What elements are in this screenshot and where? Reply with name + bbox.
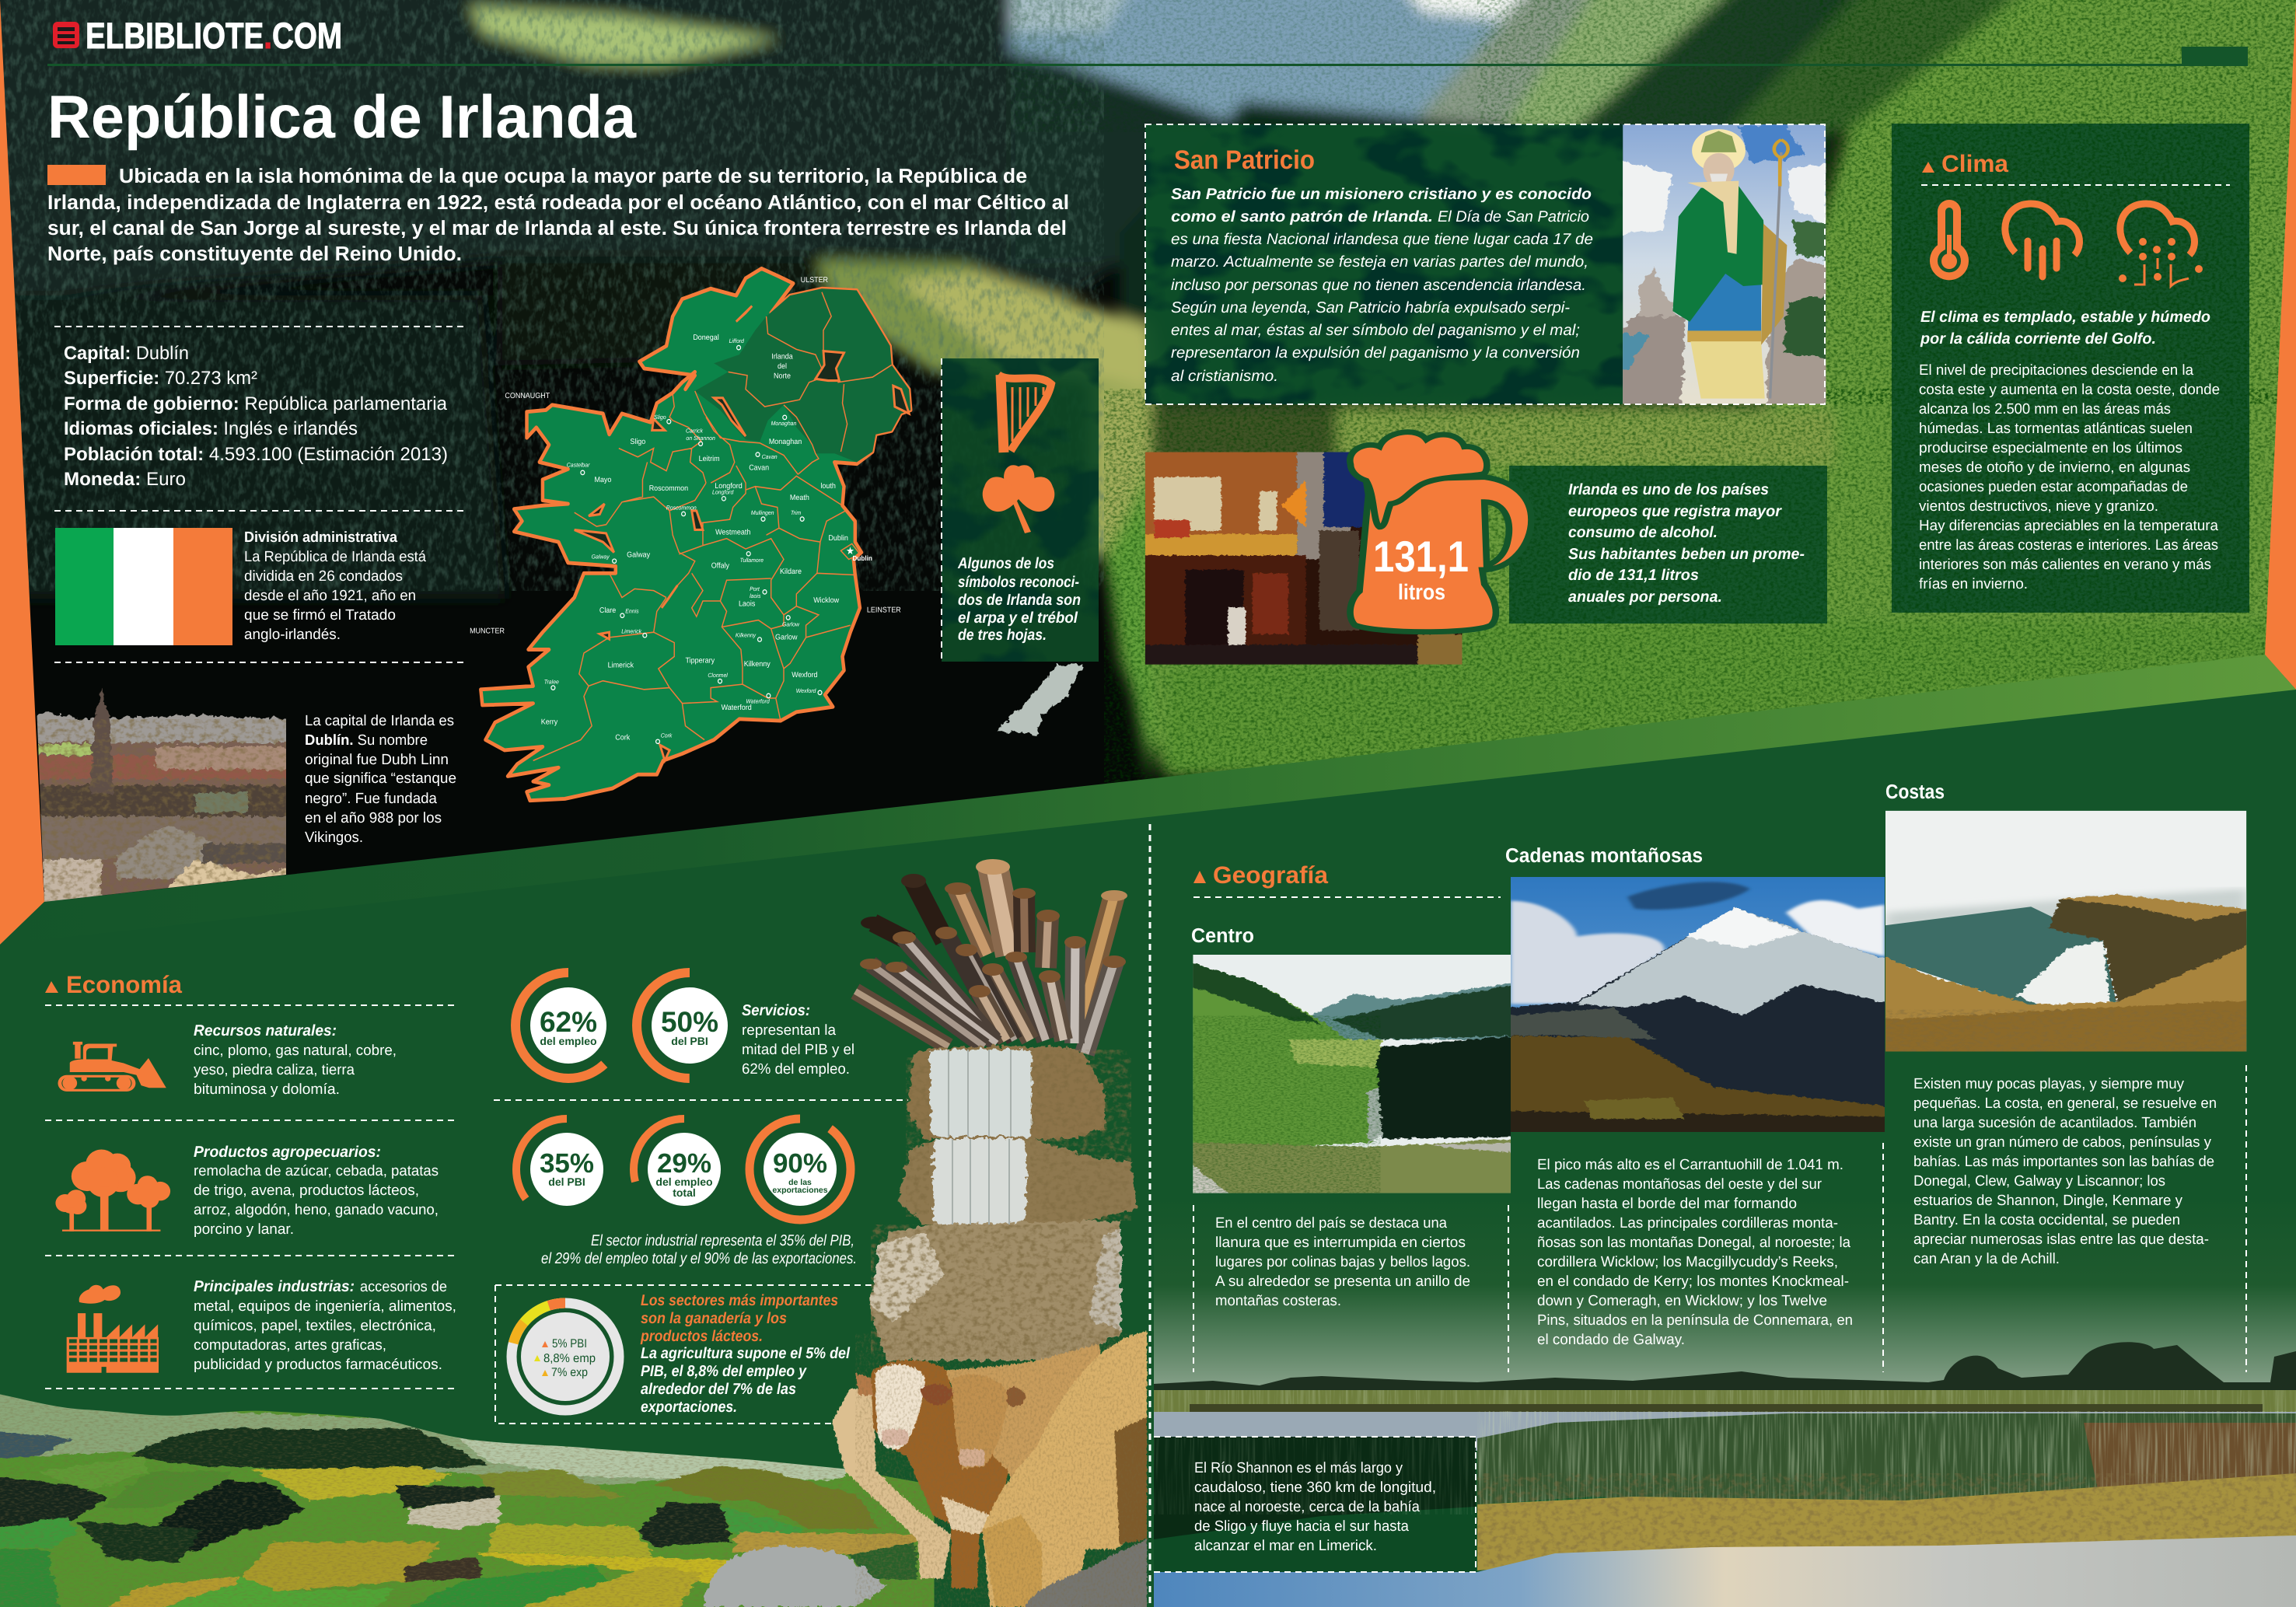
map: county labels: Cavan <box>762 453 778 460</box>
heading: Economía: Economía <box>66 971 183 998</box>
cow: front-left <box>871 1360 1008 1588</box>
header rule <box>47 64 2182 66</box>
text: Costas: una larga sucesión de acantilados. También <box>1913 1115 2196 1131</box>
text: climate body: interiores son más calientes en verano y más <box>1919 557 2211 573</box>
text: Costas: can Aran y la de Achill. <box>1913 1251 2060 1267</box>
map: county labels: Limerick <box>621 628 642 634</box>
text: agricultural products: de trigo, avena, productos lácteos, <box>194 1183 419 1199</box>
icon: hail cloud <box>2119 204 2203 286</box>
photo: central valley <box>1184 955 1519 1198</box>
text: administrative division: que se firmó el Tratado <box>244 607 396 624</box>
water strip <box>1154 1412 2296 1451</box>
cow: middle body <box>941 1343 1114 1490</box>
intro paragraph: sur, el canal de San Jorge al sureste, y el mar de Irlanda al este. Su única frontera terrestre es Irlanda del <box>47 216 1067 239</box>
text: Costas: pequeñas. La costa, en general, se resuelve en <box>1913 1095 2217 1112</box>
text: Dublin capital: negro”. Fue fundada <box>305 791 437 807</box>
text: symbols caption: Algunos de los <box>957 555 1054 572</box>
column heading: Cadenas montañosas: Cadenas montañosas <box>1505 844 1703 867</box>
text: Centro <box>1215 1215 1470 1309</box>
map: county labels: Mayo <box>594 475 611 484</box>
stat: 50% PBI: 50% <box>661 1006 718 1038</box>
map: county labels: Carrick <box>686 428 704 434</box>
facts text <box>64 343 448 490</box>
map: province labels: LEINSTER <box>867 606 901 614</box>
orange wedge: left <box>0 0 44 945</box>
map: county labels: Cavan <box>749 463 769 472</box>
icon: trees <box>55 1150 170 1231</box>
text: Costas: Existen muy pocas playas, y siempre muy <box>1913 1076 2184 1092</box>
chart labels: 5% PBI <box>552 1337 587 1350</box>
map: county labels: Longford <box>715 481 743 490</box>
map: county labels: louth <box>820 481 836 490</box>
text: natural resources: bituminosa y dolomía. <box>194 1081 340 1098</box>
map: county labels: Garlow <box>775 633 798 641</box>
text: Costas: Bantry. En la costa occidental, se pueden <box>1913 1212 2180 1228</box>
icon: beer mug <box>1350 432 1531 632</box>
panel: agriculture <box>495 1285 874 1424</box>
map: county labels: Offaly <box>711 561 729 570</box>
text: services: 62% del empleo. <box>742 1061 850 1078</box>
text: San Patricio body: Según una leyenda, San Patricio habría expulsado serpi- <box>1171 299 1570 316</box>
icon: thermometer <box>1934 204 1965 276</box>
map: loughs <box>575 306 909 760</box>
map: county labels: Cork <box>661 732 673 739</box>
map: county labels: Clare <box>599 606 616 614</box>
text: San Patricio body: representaron la expulsión del paganismo y la conversión <box>1171 344 1580 362</box>
map: county labels: Garlow <box>782 621 800 627</box>
text: climate body: entre las áreas costeras e interiores. Las áreas <box>1919 537 2218 554</box>
text: alcohol consumption: anuales por persona. <box>1568 589 1722 606</box>
map: county labels: Kilkenny <box>736 632 757 638</box>
text: San Patricio body: como el santo patrón de Irlanda. <box>1171 208 1433 225</box>
text: Cadenas montañosas: en el condado de Kerry; los montes Knockmeal- <box>1537 1273 1849 1290</box>
map: county labels: Mullingen <box>751 509 774 516</box>
text: Cadenas montañosas <box>1537 1157 1853 1348</box>
text: symbols caption: símbolos reconoci- <box>958 574 1079 591</box>
intro paragraph: Irlanda, independizada de Inglaterra en 1922, está rodeada por el océano Atlántico, con el mar Céltico al <box>47 190 1069 214</box>
illustration: cattle <box>832 1332 1147 1607</box>
icon: rock in farmland <box>704 1546 886 1607</box>
stat: 62% empleo <box>515 973 621 1078</box>
text: agricultural products: arroz, algodón, heno, ganado vacuno, <box>194 1202 439 1218</box>
text: climate lead <box>1920 309 2210 348</box>
header <box>47 15 2248 66</box>
sky gradient <box>1154 1197 2296 1392</box>
text: Centro: En el centro del país se destaca una <box>1215 1215 1447 1231</box>
cow: left, partly hidden <box>832 1388 951 1579</box>
text: San Patricio body: incluso por personas que no tienen ascendencia irlandesa. <box>1171 277 1586 294</box>
map: city markers <box>551 345 822 743</box>
map: county labels: del <box>778 362 787 370</box>
map: county labels: Laois <box>739 599 755 608</box>
text: Shannon river: El Río Shannon es el más largo y <box>1194 1460 1403 1476</box>
map: county labels: Dublin <box>828 533 848 542</box>
facts text: Capital: Dublín <box>64 343 189 364</box>
panel: San Patricio <box>1145 124 1830 407</box>
text: most important sectors: La agricultura supone el 5% del <box>641 1345 850 1362</box>
map: Dublin capital label: Dublin <box>853 554 872 562</box>
map: county labels: Waterford <box>746 698 770 704</box>
stat: 29% empleo: total <box>673 1186 696 1199</box>
map: county labels: Sligo <box>654 414 666 421</box>
column heading: Centro: Centro <box>1191 924 1254 947</box>
text: climate body <box>1919 362 2220 592</box>
text: San Patricio body: San Patricio fue un misionero cristiano y es conocido <box>1171 186 1592 203</box>
map: county labels: laois <box>750 592 761 599</box>
text: Dublin capital: Vikingos. <box>305 830 363 846</box>
illustration: wool bales <box>869 1046 1137 1361</box>
heading: San Patricio: San Patricio <box>1174 145 1315 175</box>
panel: Shannon river <box>1154 1437 1476 1572</box>
stat: 62% empleo: 62% <box>540 1006 597 1038</box>
stat: 50% PBI <box>637 973 743 1078</box>
text: Costas: apreciar numerosas islas entre las que desta- <box>1913 1231 2209 1248</box>
map: county labels: Meath <box>790 493 809 501</box>
text: Shannon river: nace al noroeste, cerca de la bahía <box>1194 1499 1420 1515</box>
lake water <box>1154 1535 2296 1607</box>
chart labels: 7% exp <box>551 1366 588 1379</box>
text: administrative division: dividida en 26 condados <box>244 568 403 585</box>
cow: middle head <box>951 1375 1008 1469</box>
photo: Irish valley background <box>0 0 2296 933</box>
map: county labels: Galway <box>627 550 650 559</box>
icon: harp <box>998 375 1051 452</box>
photo: Dublin pub at night <box>1141 449 1466 668</box>
map: county labels: Tipperary <box>685 656 715 665</box>
text: climate body: húmedas. Las tormentas atlánticas suelen <box>1919 421 2193 437</box>
text: Costas: estuarios de Shannon, Dingle, Kenmare y <box>1913 1193 2182 1209</box>
text: San Patricio body: entes al mar, éstas al ser símbolo del paganismo y el mal; <box>1171 322 1580 339</box>
stat: 90% exportaciones <box>750 1119 851 1220</box>
map: county labels: Tralee <box>544 679 559 685</box>
text: services: representan la <box>742 1022 836 1039</box>
text: industrial sector: El sector industrial representa el 35% del PIB, <box>591 1232 854 1249</box>
text: symbols caption: dos de Irlanda son <box>958 592 1081 609</box>
map: county labels: Tullamore <box>740 557 764 564</box>
icon: factory <box>67 1285 159 1373</box>
map: county labels: Longford <box>712 489 734 495</box>
stat: 35% PBI <box>516 1119 617 1220</box>
text: Shannon river: caudaloso, tiene 360 km de longitud, <box>1194 1479 1436 1496</box>
text: administrative division: anglo-irlandés. <box>244 627 341 643</box>
facts text: Forma de gobierno: República parlamentaria <box>64 393 448 414</box>
map: county labels: Wicklow <box>813 596 839 604</box>
stat: 62% empleo: del empleo <box>540 1035 597 1047</box>
text: Cadenas montañosas: cordillera Wicklow; los Macgillycuddy’s Reeks, <box>1537 1254 1838 1270</box>
map: county labels: Kildare <box>780 567 802 575</box>
text: Dublin capital: en el año 988 por los <box>305 810 442 826</box>
text: main industries: metal, equipos de ingeniería, alimentos, <box>194 1298 456 1315</box>
text: Cadenas montañosas: llegan hasta el borde del mar formando <box>1537 1196 1797 1212</box>
reeds <box>1477 1413 2296 1508</box>
text: services <box>742 1002 854 1078</box>
panel: country facts <box>54 327 468 662</box>
text: administrative division: La República de Irlanda está <box>244 549 426 565</box>
map: county labels: Roscommon <box>666 505 697 511</box>
stat: 29% empleo: del empleo <box>655 1176 713 1188</box>
text: alcohol consumption: europeos que registra mayor <box>1568 503 1782 520</box>
text: administrative division <box>244 529 426 643</box>
map: county labels: on Shannon <box>686 435 715 442</box>
photo: sea cliffs <box>1876 811 2254 1056</box>
text: symbols caption: de tres hojas. <box>958 627 1047 644</box>
map: county labels <box>541 333 848 742</box>
panel: Economía <box>45 971 459 1389</box>
map: county labels: Leitrim <box>699 454 720 463</box>
text: industrial sector: el 29% del empleo total y el 90% de las exportaciones. <box>541 1250 857 1267</box>
illustration: metal rods <box>855 859 1127 1053</box>
text: services: Servicios: <box>742 1002 810 1019</box>
text: San Patricio body: es una fiesta Nacional irlandesa que tiene lugar cada 17 de <box>1171 231 1593 248</box>
stat: 90% exportaciones: de las <box>788 1178 812 1187</box>
map: province labels: CONNAUGHT <box>505 391 550 400</box>
orange wedge: right <box>2265 0 2296 690</box>
icon: bulldozer <box>58 1042 166 1092</box>
chart labels: 8,8% emp <box>543 1352 596 1365</box>
flag of Ireland <box>55 528 232 645</box>
text: alcohol consumption <box>1568 481 1805 606</box>
map: county labels: Norte <box>774 371 791 380</box>
bottom-right lake photo <box>1154 1197 2296 1607</box>
text: main industries: Principales industrias: <box>194 1278 355 1295</box>
text: Shannon river: alcanzar el mar en Limerick. <box>1194 1538 1377 1554</box>
diagonal green band <box>0 655 2296 945</box>
text: Cadenas montañosas: acantilados. Las principales cordilleras monta- <box>1537 1215 1838 1231</box>
text: Dublin capital <box>305 713 456 846</box>
photo: Saint Patrick portrait <box>1618 124 1830 407</box>
map: county labels: Trim <box>791 509 801 516</box>
map: county labels: Limerick <box>608 660 634 669</box>
text: San Patricio body: al cristianismo. <box>1171 368 1278 385</box>
text: Cadenas montañosas: Las cadenas montañosas del oeste y del sur <box>1537 1176 1822 1193</box>
text: alcohol consumption: Sus habitantes beben un prome- <box>1568 546 1805 563</box>
map: Northern Ireland <box>695 288 910 462</box>
photo: Dublin skyline <box>37 687 286 902</box>
text: most important sectors: PIB, el 8,8% del empleo y <box>641 1363 807 1380</box>
text: natural resources: yeso, piedra caliza, tierra <box>194 1062 355 1078</box>
text: symbols caption: el arpa y el trébol <box>958 610 1078 627</box>
map: county labels: Cork <box>615 733 631 742</box>
text: Cadenas montañosas: ñosas son las montañas Donegal, al noroeste; la <box>1537 1235 1850 1251</box>
golden marsh <box>1477 1473 2296 1570</box>
text: Cadenas montañosas: down y Comeragh, en Wicklow; y los Twelve <box>1537 1293 1827 1309</box>
text: Cadenas montañosas: Pins, situados en la península de Connemara, en <box>1537 1312 1853 1329</box>
header tab <box>2182 47 2248 66</box>
orange marker <box>47 165 106 185</box>
column divider <box>1149 824 1151 1607</box>
map: county labels: Kilkenny <box>744 659 771 668</box>
text: agricultural products: Productos agropecuarios: <box>194 1144 381 1161</box>
text: climate body: ocasiones pueden estar acompañadas de <box>1919 479 2188 495</box>
value: 131,1 litros: 131,1 <box>1373 532 1469 581</box>
grass bank <box>1154 1390 2296 1413</box>
logo: ELBIBLIOTE.COM <box>86 15 342 56</box>
icon: rain cloud <box>2005 204 2079 277</box>
photo: farmland landscape <box>0 1386 952 1607</box>
text: main industries: accesorios de <box>360 1279 447 1295</box>
facts text: Moneda: Euro <box>64 469 186 490</box>
text: most important sectors: productos lácteos. <box>640 1328 763 1345</box>
text: main industries: químicos, papel, textiles, electrónica, <box>194 1318 436 1334</box>
text: climate lead: El clima es templado, estable y húmedo <box>1920 309 2210 326</box>
text: Centro: A su alrededor se presenta un anillo de <box>1215 1273 1470 1290</box>
heading: Geografía: Geografía <box>1213 861 1329 889</box>
panel: Geografía <box>1184 780 2254 1372</box>
text: climate body: frías en invierno. <box>1919 576 2028 592</box>
panel: national symbols <box>942 358 1099 662</box>
text: climate body: vientos destructivos, nieve y granizo. <box>1919 498 2158 515</box>
cow: right, grazing <box>982 1332 1147 1607</box>
text: natural resources: cinc, plomo, gas natural, cobre, <box>194 1043 397 1059</box>
map: county labels: Galway <box>592 554 610 560</box>
text: Centro: montañas costeras. <box>1215 1293 1341 1309</box>
text: Dublin capital: que significa “estanque <box>305 770 456 787</box>
map: Dublin star: ★ <box>846 546 854 557</box>
stat: 90% exportaciones: 90% <box>773 1148 827 1179</box>
text: alcohol consumption: dio de 131,1 litros <box>1568 567 1699 584</box>
intro paragraph: Ubicada en la isla homónima de la que ocupa la mayor parte de su territorio, la República de <box>119 164 1027 187</box>
map: county labels: Ennis <box>625 608 639 614</box>
icon: beer mug: litros <box>1398 580 1445 604</box>
text: agricultural products: remolacha de azúcar, cebada, patatas <box>194 1163 439 1179</box>
treeline <box>1154 1342 2296 1393</box>
text: climate body: costa este y aumenta en la costa oeste, donde <box>1919 382 2220 398</box>
white stream in valley <box>997 665 1085 735</box>
text: main industries: publicidad y productos farmacéuticos. <box>194 1357 442 1373</box>
text: alcohol consumption: consumo de alcohol. <box>1568 524 1718 541</box>
map: county labels: Wexford <box>796 687 816 694</box>
chart: agriculture donut <box>512 1303 619 1410</box>
title: República de Irlanda <box>47 82 637 151</box>
map: county labels: Wexford <box>792 670 818 679</box>
text: most important sectors: exportaciones. <box>641 1399 737 1416</box>
text: administrative division: desde el año 1921, año en <box>244 588 416 604</box>
stat: 29% empleo: 29% <box>657 1148 711 1179</box>
text: natural resources <box>194 1022 397 1098</box>
map: county labels: Waterford <box>722 703 752 711</box>
text: Costas <box>1913 1076 2217 1267</box>
text: symbols caption <box>957 555 1081 644</box>
map: county labels: Donegal <box>693 333 719 341</box>
stat: 35% PBI: 35% <box>540 1148 594 1179</box>
heading: Clima: Clima <box>1941 150 2009 177</box>
text: Costas: existe un gran número de cabos, penínsulas y <box>1913 1134 2211 1151</box>
map: county labels: Monaghan <box>771 420 796 427</box>
stat: 35% PBI: del PBI <box>548 1176 585 1188</box>
column heading: Costas: Costas <box>1885 780 1945 803</box>
map: county labels: Monaghan <box>769 437 802 445</box>
text: most important sectors: Los sectores más importantes <box>641 1292 838 1309</box>
map: county labels: Clonmel <box>708 672 728 679</box>
map: county labels: Kerry <box>541 718 557 726</box>
map: province labels: ULSTER <box>801 275 828 284</box>
map: county labels: Westmeath <box>715 527 750 536</box>
text: administrative division: División administrativa <box>244 529 397 546</box>
map: county labels: Irlanda <box>771 351 793 361</box>
text: agricultural products <box>194 1144 439 1238</box>
text: Dublin capital: Dublín. Su nombre <box>305 732 428 749</box>
text: industrial sector <box>541 1232 857 1267</box>
text: most important sectors <box>640 1292 850 1416</box>
panel: Clima <box>1892 124 2249 613</box>
photo: snowy mountain <box>1505 877 1894 1137</box>
text: San Patricio body <box>1171 186 1593 385</box>
text: Dublin capital: original fue Dubh Linn <box>305 752 449 768</box>
text: alcohol consumption: Irlanda es uno de los países <box>1568 481 1769 498</box>
text: climate body: meses de otoño y de invierno, en algunas <box>1919 459 2190 476</box>
facts text: Superficie: 70.273 km² <box>64 368 257 389</box>
text: Cadenas montañosas: El pico más alto es el Carrantuohill de 1.041 m. <box>1537 1157 1843 1173</box>
intro paragraph: Norte, país constituyente del Reino Unido. <box>47 242 462 265</box>
icon: shamrock <box>983 465 1054 533</box>
text: climate body: producirse especialmente en los últimos <box>1919 440 2182 456</box>
text: climate lead: por la cálida corriente del Golfo. <box>1920 330 2156 348</box>
text: climate body: El nivel de precipitaciones desciende en la <box>1919 362 2193 379</box>
map: county labels: Lifford <box>729 337 744 344</box>
map: province labels <box>470 275 901 635</box>
rock <box>1024 1539 1147 1607</box>
text: most important sectors: son la ganadería y los <box>641 1310 787 1327</box>
stat: 90% exportaciones: exportaciones <box>772 1186 828 1195</box>
text: natural resources: Recursos naturales: <box>194 1022 337 1039</box>
map: province labels: MUNCTER <box>470 627 505 635</box>
text: Shannon river: de Sligo y fluye hacia el sur hasta <box>1194 1518 1409 1535</box>
text: Shannon river <box>1194 1460 1436 1554</box>
text: main industries <box>194 1278 456 1373</box>
text: Centro: lugares por colinas bajas y bellos lagos. <box>1215 1254 1470 1270</box>
stat: 50% PBI: del PBI <box>671 1035 708 1047</box>
text: services: mitad del PIB y el <box>742 1042 854 1058</box>
map of Ireland <box>470 268 910 801</box>
facts text: Idiomas oficiales: Inglés e irlandés <box>64 418 358 439</box>
map: county labels: Port <box>750 585 760 592</box>
intro paragraph <box>47 164 1069 265</box>
text: Centro: llanura que es interrumpida en ciertos <box>1215 1235 1466 1251</box>
text: Cadenas montañosas: el condado de Galway. <box>1537 1332 1685 1348</box>
text: San Patricio body: El Día de San Patricio <box>1438 208 1589 225</box>
chart labels <box>534 1337 596 1379</box>
text: climate body: Hay diferencias apreciables en la temperatura <box>1919 518 2218 534</box>
map: county labels: Roscommon <box>649 484 688 492</box>
text: most important sectors: alrededor del 7% de las <box>641 1381 796 1398</box>
text: climate body: alcanza los 2.500 mm en las áreas más <box>1919 401 2171 417</box>
text: San Patricio body: marzo. Actualmente se festeja en varias partes del mundo, <box>1171 253 1588 271</box>
stat: 29% empleo <box>634 1119 735 1220</box>
map: county labels: Castelbar <box>567 462 590 468</box>
text: Costas: bahías. Las más importantes son las bahías de <box>1913 1154 2214 1170</box>
panel: alcohol consumption <box>1509 466 1827 624</box>
text: main industries: computadoras, artes graficas, <box>194 1337 386 1354</box>
text: Costas: Donegal, Clew, Galway y Liscannor; los <box>1913 1173 2165 1190</box>
text: agricultural products: porcino y lanar. <box>194 1221 294 1238</box>
map: county labels: Sligo <box>630 437 645 445</box>
text: Dublin capital: La capital de Irlanda es <box>305 713 454 729</box>
facts text: Población total: 4.593.100 (Estimación 2013) <box>64 444 448 465</box>
map: island outline <box>481 268 910 801</box>
